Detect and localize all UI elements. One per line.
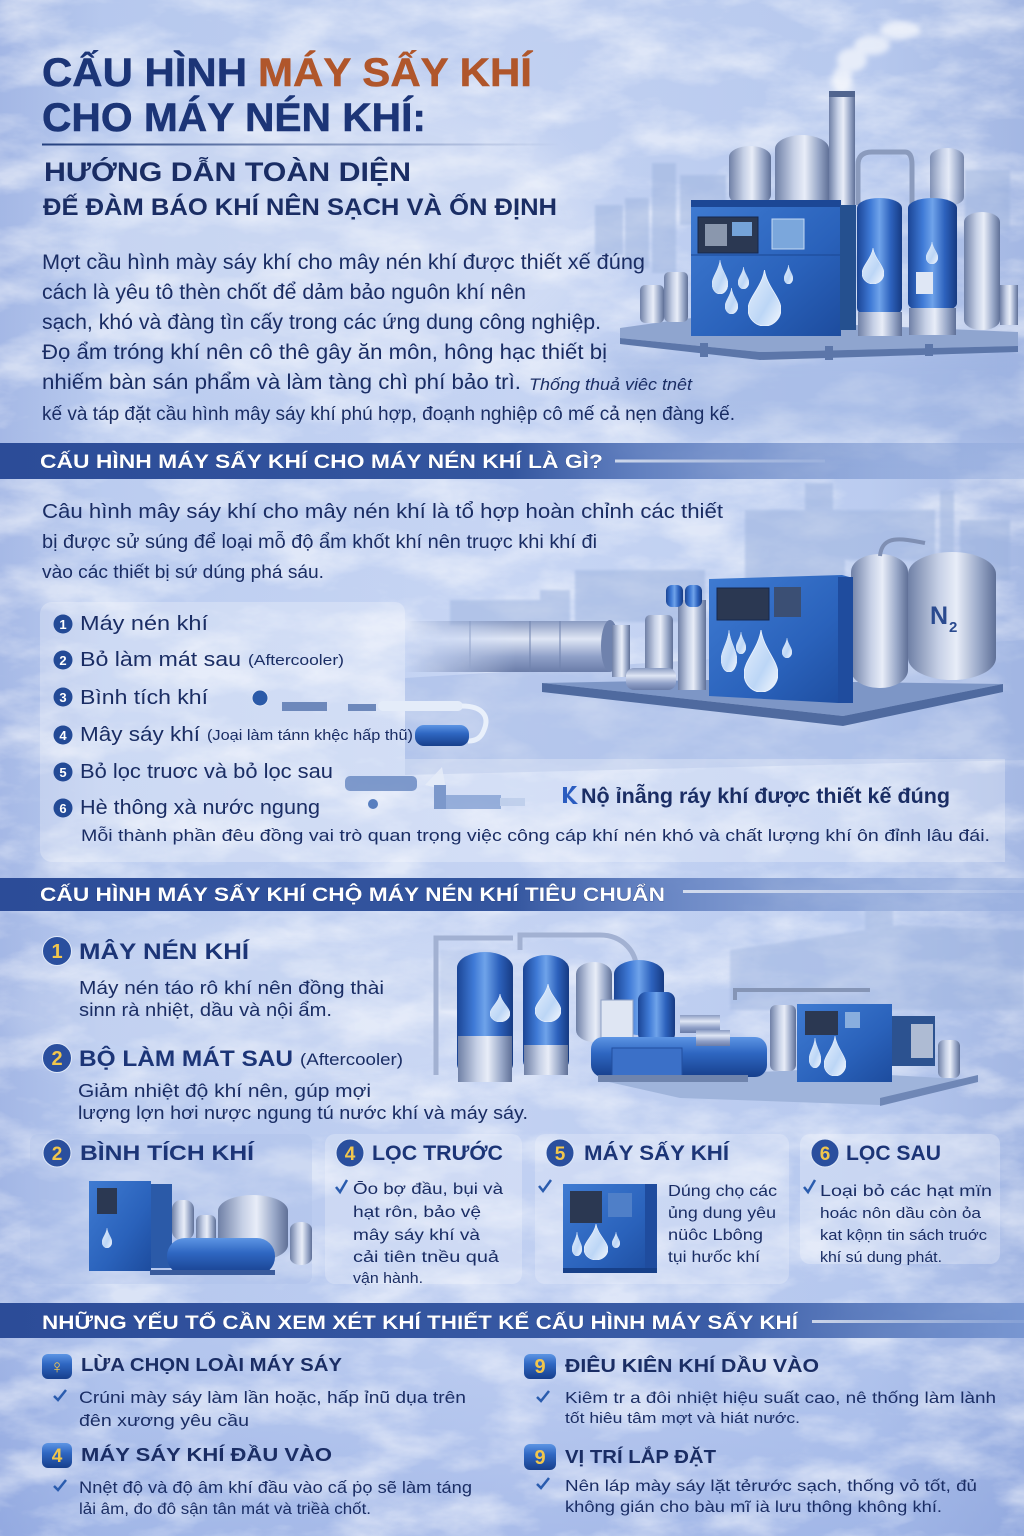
section band 1: CẤU HÌNH MÁY SẤY KHÍ CHO MÁY NÉN KHÍ LÀ GÌ? bbox=[40, 451, 603, 473]
step 2 bbox=[42, 1044, 528, 1123]
section 2 paragraph: Câu hình mây sáy khí cho mây nén khí là tổ hợp hoàn chỉnh các thiết bbox=[42, 501, 723, 523]
intro paragraph: cách là yêu tô thèn chốt để dảm bảo nguôn khí nên bbox=[42, 281, 526, 304]
intro paragraph: sạch, khó và đàng tìn cấy trong các ứng dung công nghiệp. bbox=[42, 311, 601, 334]
smoke plume bbox=[832, 21, 920, 94]
intro paragraph: nhiếm bàn sán phẩm và làm tàng chì phí bảo trì. bbox=[42, 371, 521, 394]
factor: dryer type: ♀ bbox=[50, 1357, 64, 1378]
list item 4: (Joại làm tánn khệc hấp thũ) bbox=[207, 727, 413, 744]
card: pre-filter: hạt rôn, bảo vệ bbox=[353, 1204, 481, 1221]
card: pre-filter: cải tiên tnều quả bbox=[353, 1249, 499, 1266]
intro paragraph: Mợt cầu hình mày sáy khí cho mây nén khí được thiết xế đúng bbox=[42, 251, 645, 274]
card: pre-filter: Ōo bợ đầu, bụi và bbox=[353, 1180, 503, 1198]
icon: hose tool bbox=[252, 690, 486, 746]
section band 1 bbox=[0, 443, 1024, 479]
list item 5: 5 bbox=[59, 765, 67, 780]
list item 2: Bỏ làm mát sau bbox=[80, 649, 241, 671]
factor: inlet air conditions: tốt hiêu tâm mợt và hiát nước. bbox=[565, 1411, 800, 1427]
nitrogen tanks: N bbox=[930, 602, 948, 630]
factor: installation location: Nên láp mày sáy lặt tẻrước sạch, thống vỏ tốt, đủ bbox=[565, 1478, 977, 1495]
faded skyline bbox=[440, 905, 1024, 1010]
step 1: 1 bbox=[51, 941, 63, 963]
factor: dryer type: Crúni mày sáy làm lần hoặc, hấp ỉnũ dụa trên bbox=[79, 1389, 466, 1407]
factor: dryer type: đên xương yêu cầu bbox=[79, 1412, 249, 1430]
list item 2: (Aftercooler) bbox=[248, 652, 344, 669]
platform bbox=[542, 680, 1003, 726]
card: pre-filter: mây sáy khí và bbox=[353, 1227, 480, 1244]
factor: inlet air conditions: 9 bbox=[534, 1356, 546, 1378]
card: after-filter: 6 bbox=[820, 1144, 830, 1165]
panel: component list bbox=[40, 602, 1005, 862]
factor: inlet dryer bbox=[42, 1443, 472, 1518]
ground shading bbox=[600, 340, 1024, 440]
section band 2: CẤU HÌNH MÁY SẤY KHÍ CHỘ MÁY NÉN KHÍ TIÊU CHUẨN bbox=[40, 884, 665, 906]
intro paragraph: Thống thuả viêc tnêt bbox=[529, 375, 693, 394]
illustration: factory and dryer skid, top right bbox=[595, 21, 1024, 440]
factor: dryer type bbox=[42, 1354, 466, 1430]
card: air receiver: 2 bbox=[52, 1144, 62, 1165]
list item 4: Mây sáy khí bbox=[80, 724, 200, 746]
step 1: sinn rà nhiệt, dầu và nội ẩm. bbox=[79, 1000, 332, 1020]
card: after-filter: khí sú dung phát. bbox=[820, 1249, 942, 1266]
intro paragraph bbox=[42, 251, 735, 425]
subtitle bbox=[43, 156, 557, 221]
list item 3: Bình tích khí bbox=[80, 687, 209, 709]
factor: installation location: không gián cho bàu mĩ ià lưu thông không khí. bbox=[565, 1499, 942, 1516]
factor: inlet air conditions: Kiêm tr a đôi nhiệt hiệu suất cao, nê thống làm lành bbox=[565, 1390, 996, 1407]
section 2 paragraph: vào các thiết bị sứ dúng phá sáu. bbox=[42, 562, 324, 582]
callout: correct dryer design: Nộ ỉnẫng ráy khí được thiết kế đúng bbox=[581, 784, 950, 808]
factor: dryer type: LỪA CHỌN LOÀI MÁY SÁY bbox=[81, 1354, 342, 1375]
ground shading bbox=[405, 640, 1024, 775]
factor: installation location: VỊ TRÍ LẮP ĐẶT bbox=[565, 1446, 716, 1467]
section band 2 bbox=[0, 878, 1024, 911]
card: air receiver bbox=[30, 1134, 312, 1284]
card: dryer bbox=[535, 1134, 789, 1284]
nitrogen tanks: 2 bbox=[949, 619, 957, 636]
step 2: Giảm nhiệt độ khí nên, gúp mợi bbox=[78, 1081, 371, 1101]
factor: inlet dryer: 4 bbox=[52, 1446, 63, 1467]
list item 1: Máy nén khí bbox=[80, 613, 209, 635]
aftercooler bbox=[591, 1037, 767, 1082]
dryer cabinet bbox=[709, 575, 853, 703]
step 2: lượng lợn hơi nược ngung tú nước khí và máy sáy. bbox=[78, 1103, 528, 1123]
step 2: (Aftercooler) bbox=[300, 1050, 403, 1069]
list item 4 bbox=[54, 724, 413, 746]
card: after-filter: kat kộṇn tin sách truớc bbox=[820, 1227, 988, 1244]
list item 6: 6 bbox=[59, 801, 67, 816]
subtitle: ĐẾ ĐÀM BÁO KHÍ NÊN SẠCH VÀ ỐN ĐỊNH bbox=[43, 193, 557, 221]
steel tank, right bbox=[964, 212, 1018, 330]
section band 3 bbox=[0, 1303, 1024, 1338]
card: after-filter: LỌC SAU bbox=[846, 1142, 941, 1165]
title bbox=[42, 49, 533, 140]
card: pre-filter bbox=[325, 1134, 522, 1287]
factor: inlet dryer: lải âm, đo đô sận tân mát và triềà chốt. bbox=[79, 1501, 371, 1518]
faded skyline bbox=[450, 483, 1010, 625]
frame pipes bbox=[436, 935, 636, 1075]
illustration: standard dryer plant bbox=[436, 905, 1024, 1106]
dryer cabinet bbox=[797, 1004, 892, 1082]
factor: installation location: 9 bbox=[534, 1447, 546, 1469]
icon: dryer unit bbox=[563, 1184, 657, 1273]
card: air receiver: BÌNH TÍCH KHÍ bbox=[80, 1142, 255, 1165]
platform bbox=[620, 318, 1018, 360]
factor: inlet dryer: Nnệt độ và độ âm khí đầu vào cấ ṗọ sẽ làm táng bbox=[79, 1479, 472, 1497]
blue tanks bbox=[857, 198, 957, 336]
big pipe bbox=[405, 620, 619, 672]
intro paragraph: kế và táp đặt cầu hình mây sáy khí phú hợp, đoạnh nghiệp cô mế cả nẹn đàng kế. bbox=[42, 404, 735, 425]
piping bbox=[680, 990, 870, 1071]
subtitle: HƯỚNG DẪN TOÀN DIỆN bbox=[44, 156, 411, 187]
platform bbox=[600, 1070, 978, 1106]
step 1: MÂY NÉN KHÍ bbox=[79, 939, 250, 964]
list item 6: Hè thông xà nước ngung bbox=[80, 797, 320, 819]
card: dryer: tụi hưốc khí bbox=[668, 1249, 761, 1266]
list item 3: 3 bbox=[59, 690, 67, 705]
section band 3: NHỮNG YẾU TỐ CẦN XEM XÉT KHÍ THIẾT KẾ CẤU HÌNH MÁY SẤY KHÍ bbox=[42, 1312, 799, 1334]
factor: inlet air conditions bbox=[524, 1354, 996, 1427]
illustration: compressor line with nitrogen tanks bbox=[405, 483, 1024, 775]
step 2: BỘ LÀM MÁT SAU bbox=[79, 1046, 293, 1071]
dryer cabinet bbox=[691, 200, 856, 336]
cooling unit bbox=[888, 1016, 935, 1066]
steel filter small, left bbox=[640, 272, 688, 323]
list item 1: 1 bbox=[59, 617, 67, 632]
factor: inlet dryer: MÁY SÁY KHÍ ĐẦU VÀO bbox=[81, 1444, 332, 1465]
card: after-filter: hoác nôn dầu còn ỏa bbox=[820, 1205, 982, 1222]
factor: inlet air conditions: ĐIÊU KIÊN KHÍ DẦU VÀO bbox=[565, 1355, 819, 1376]
icon: filter tool bbox=[345, 767, 525, 809]
step 1 bbox=[42, 936, 384, 1020]
card: dryer: ủng dung yêu bbox=[668, 1205, 776, 1222]
list item 2 bbox=[54, 649, 344, 671]
note text: Mỗi thành phần đêu đồng vai trò quan trọng việc công cáp khí nén khó và chất lượng khí ôn đỉnh lâu đái. bbox=[81, 826, 990, 845]
control box bbox=[601, 1000, 633, 1038]
blue tanks bbox=[457, 952, 664, 1082]
list item 5: Bỏ lọc truơc và bỏ lọc sau bbox=[80, 761, 333, 783]
nitrogen tanks bbox=[851, 539, 996, 688]
section 2 paragraph: bị được sử súng để loại mỗ độ ẩm khốt khí nên truợc khi khí đi bbox=[42, 531, 597, 553]
card: dryer: 5 bbox=[555, 1144, 566, 1165]
card: pre-filter: LỌC TRƯỚC bbox=[372, 1141, 503, 1165]
card: dryer: Dúng chọ các bbox=[668, 1183, 777, 1200]
card: pre-filter: 4 bbox=[345, 1144, 356, 1165]
card: pre-filter: vận hành. bbox=[353, 1270, 423, 1287]
small blue vessel bbox=[638, 992, 675, 1042]
piping cluster bbox=[612, 585, 706, 690]
title: CẤU HÌNH bbox=[42, 49, 247, 95]
card: after-filter: Loại bỏ các hạt mïn bbox=[820, 1183, 992, 1200]
list item 4: 4 bbox=[59, 728, 67, 743]
card: after-filter bbox=[800, 1134, 1000, 1266]
list item 2: 2 bbox=[59, 653, 67, 668]
section 2 paragraph bbox=[42, 501, 723, 582]
card: dryer: MÁY SẤY KHÍ bbox=[584, 1142, 730, 1165]
factor: installation location bbox=[524, 1444, 977, 1516]
step 1: Máy nén táo rô khí nên đồng thài bbox=[79, 978, 384, 998]
title: MÁY SẤY KHÍ bbox=[258, 49, 533, 95]
faded skyline bbox=[595, 163, 1010, 273]
step 2: 2 bbox=[51, 1048, 63, 1070]
small steel end tank bbox=[938, 1040, 960, 1078]
card: dryer: nüôc Lbông bbox=[668, 1227, 763, 1244]
title: CHO MÁY NÉN KHÍ: bbox=[42, 95, 426, 140]
steel towers bbox=[729, 91, 964, 215]
intro paragraph: Đọ ẩm tróng khí nên cô thê gây ăn môn, hông hạc thiết bị bbox=[42, 341, 607, 364]
icon: receiver machine bbox=[89, 1181, 312, 1275]
